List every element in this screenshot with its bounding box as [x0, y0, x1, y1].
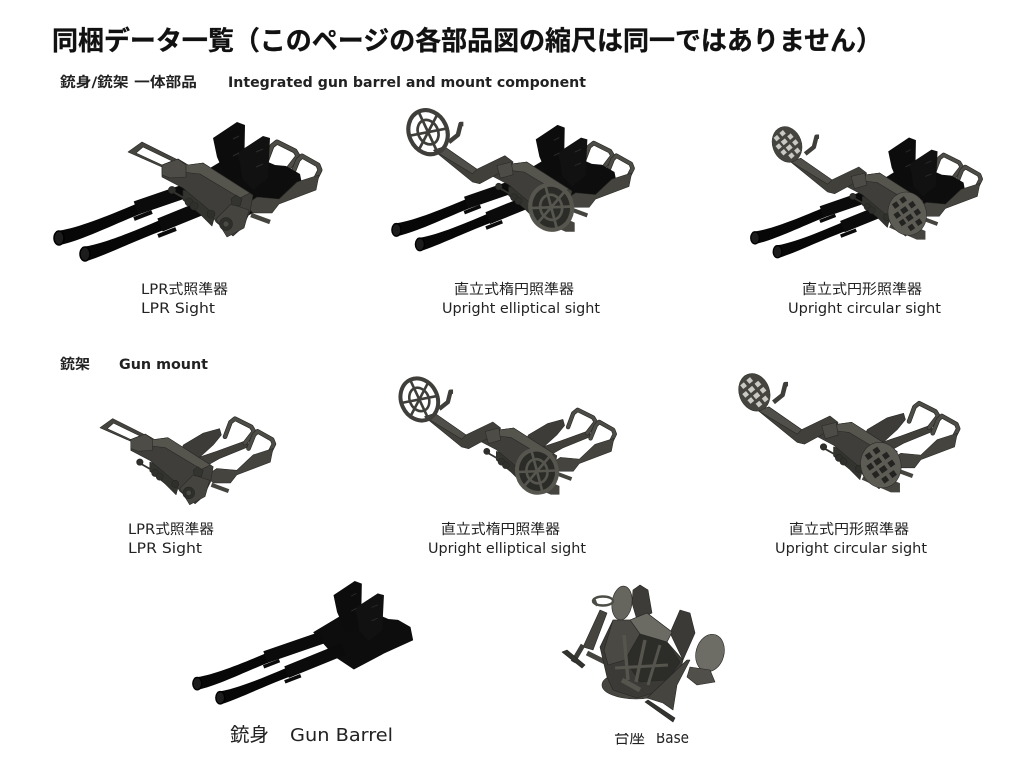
- title: 同梱データ一覧（このページの各部品図の縮尺は同一ではありません）: [52, 26, 882, 56]
- illustration: mount with LPR sight: [100, 419, 274, 505]
- section heading: integrated barrel and mount: [60, 74, 586, 91]
- label: LPR sight, mount: [128, 522, 214, 557]
- label: upright circular sight, integrated: Upright circular sight: [788, 301, 942, 317]
- label: LPR sight, mount: LPR式照準器: [128, 522, 214, 538]
- label: gun barrel: Gun Barrel: [290, 725, 393, 746]
- label: upright elliptical sight, integrated: Upright elliptical sight: [442, 301, 601, 317]
- illustration: gun with upright elliptical sight: [392, 104, 633, 251]
- section heading: gun mount: Gun mount: [119, 357, 208, 373]
- section heading: gun mount: 銃架: [60, 356, 90, 373]
- label: upright elliptical sight, mount: [428, 521, 587, 557]
- label: LPR sight, integrated: LPR Sight: [141, 301, 216, 317]
- label: base (top clipped): Base: [656, 728, 689, 747]
- section heading: integrated barrel and mount: Integrated gun barrel and mount component: [228, 75, 586, 91]
- label: upright elliptical sight, mount: Upright elliptical sight: [428, 541, 587, 557]
- label: upright elliptical sight, integrated: [442, 281, 601, 317]
- label: upright circular sight, integrated: 直立式円形照準器: [802, 282, 922, 298]
- label: upright elliptical sight, integrated: 直立式楕円照準器: [454, 281, 574, 298]
- label: upright elliptical sight, mount: 直立式楕円照準器: [441, 521, 560, 538]
- section heading: gun mount: [60, 356, 208, 373]
- illustration: mount with upright circular sight: [733, 369, 958, 492]
- label: upright circular sight, mount: Upright circular sight: [775, 541, 928, 557]
- illustration: gun barrel: [193, 581, 413, 704]
- label: LPR sight, integrated: LPR式照準器: [141, 282, 228, 298]
- illustration: base: [562, 585, 728, 722]
- label: LPR sight, integrated: [141, 282, 228, 317]
- illustration: gun with upright circular sight: [751, 122, 981, 258]
- section heading: integrated barrel and mount: 銃身/銃架 一体部品: [60, 74, 197, 91]
- label: gun barrel: 銃身: [230, 724, 269, 746]
- label: LPR sight, mount: LPR Sight: [128, 541, 203, 557]
- illustration: mount with upright elliptical sight: [394, 372, 615, 497]
- label: base (top clipped): [615, 733, 688, 745]
- illustration: gun with LPR sight: [54, 122, 320, 261]
- label: upright circular sight, mount: 直立式円形照準器: [789, 522, 909, 538]
- label: upright circular sight, integrated: [788, 282, 942, 317]
- label: gun barrel: [230, 724, 393, 746]
- label: base (top clipped): 台座: [614, 728, 645, 747]
- label: upright circular sight, mount: [775, 522, 928, 557]
